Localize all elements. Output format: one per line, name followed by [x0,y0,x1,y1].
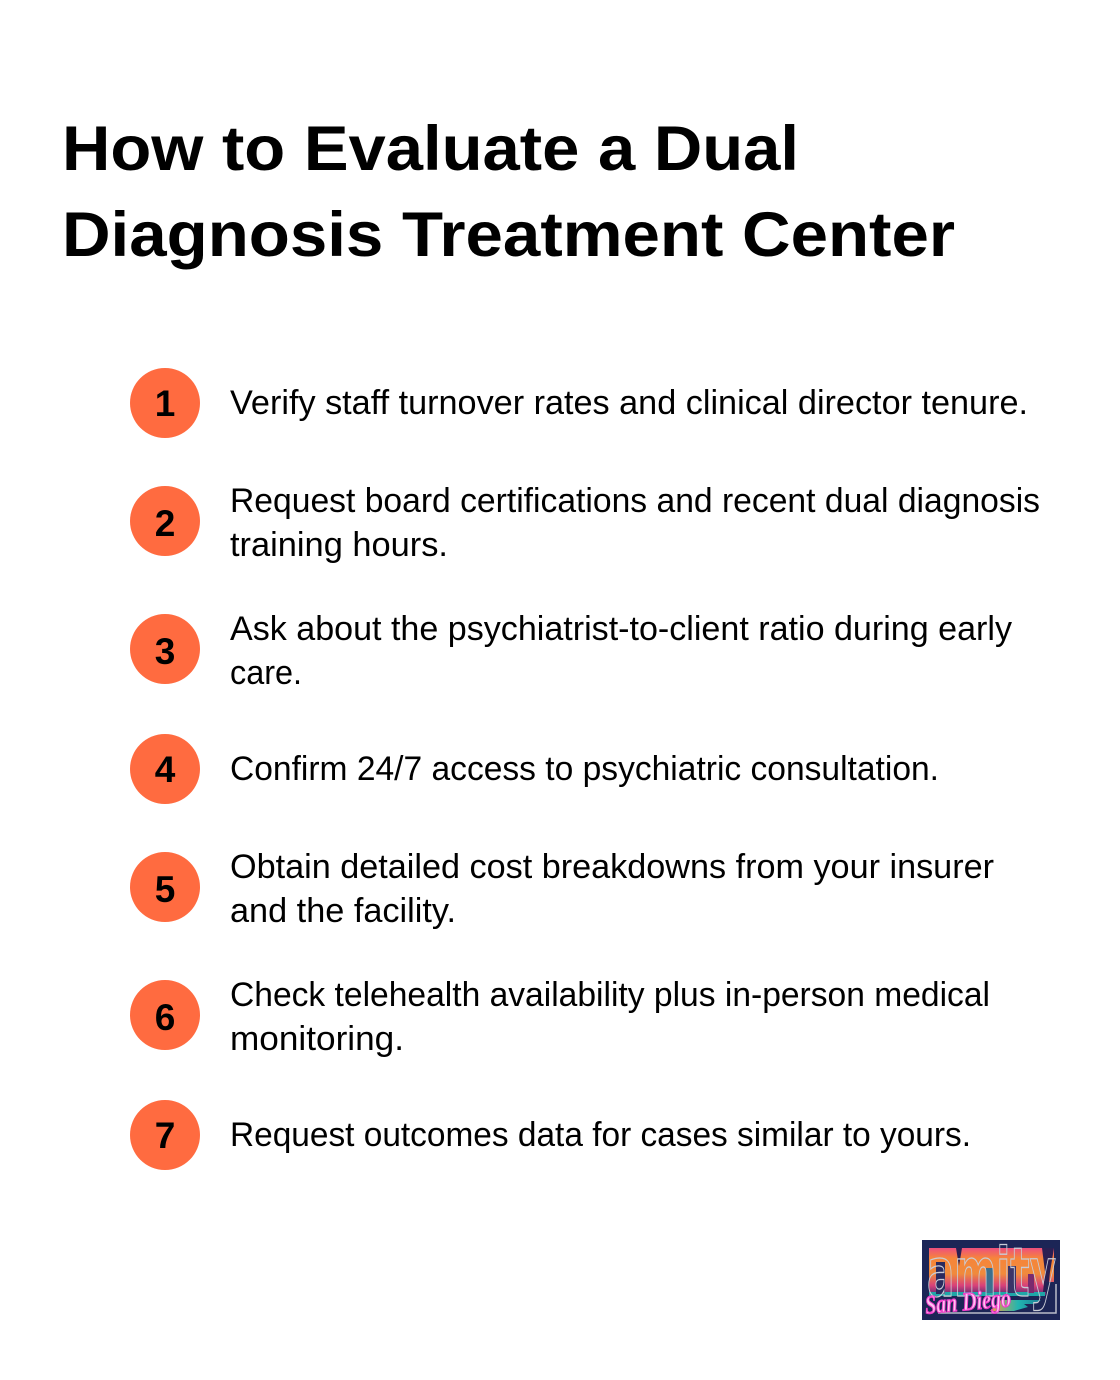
step 4 [130,734,939,804]
title: How to Evaluate a Dual [62,114,799,184]
step 7: Request outcomes data for cases similar to yours. [230,1116,971,1154]
logo: Amity San Diego [922,1235,1060,1320]
step 2: Request board certifications and recent dual diagnosis [230,482,1040,520]
step 5: Obtain detailed cost breakdowns from your insurer [230,848,994,886]
step 2: training hours. [230,526,448,564]
step 6 [130,976,990,1058]
step 4: 4 [155,749,176,790]
step 6: 6 [155,997,175,1038]
step 6: monitoring. [230,1020,404,1058]
logo script: San Diego [924,1283,1012,1320]
logo sunset scene [929,1248,1055,1296]
step 3: 3 [155,631,175,672]
step 5: and the facility. [230,892,456,930]
step 2 [130,482,1040,564]
step 3: care. [230,654,302,692]
logo wordmark: amity [927,1235,1056,1313]
step 2: 2 [155,503,175,544]
step 7: 7 [155,1115,175,1156]
step 4: Confirm 24/7 access to psychiatric consultation. [230,750,939,788]
logo shoreline [990,1300,1041,1311]
step 7 [130,1100,971,1170]
step 3 [130,610,1012,692]
step 1 [130,368,1028,438]
logo frame line [938,1284,1056,1313]
title: Diagnosis Treatment Center [62,200,955,270]
step 6: Check telehealth availability plus in-person medical [230,976,990,1014]
step 1: Verify staff turnover rates and clinical director tenure. [230,384,1028,422]
step 5: 5 [155,869,175,910]
step 3: Ask about the psychiatrist-to-client ratio during early [230,610,1012,648]
step 1: 1 [155,383,175,424]
title [62,114,955,270]
step 5 [130,848,994,930]
